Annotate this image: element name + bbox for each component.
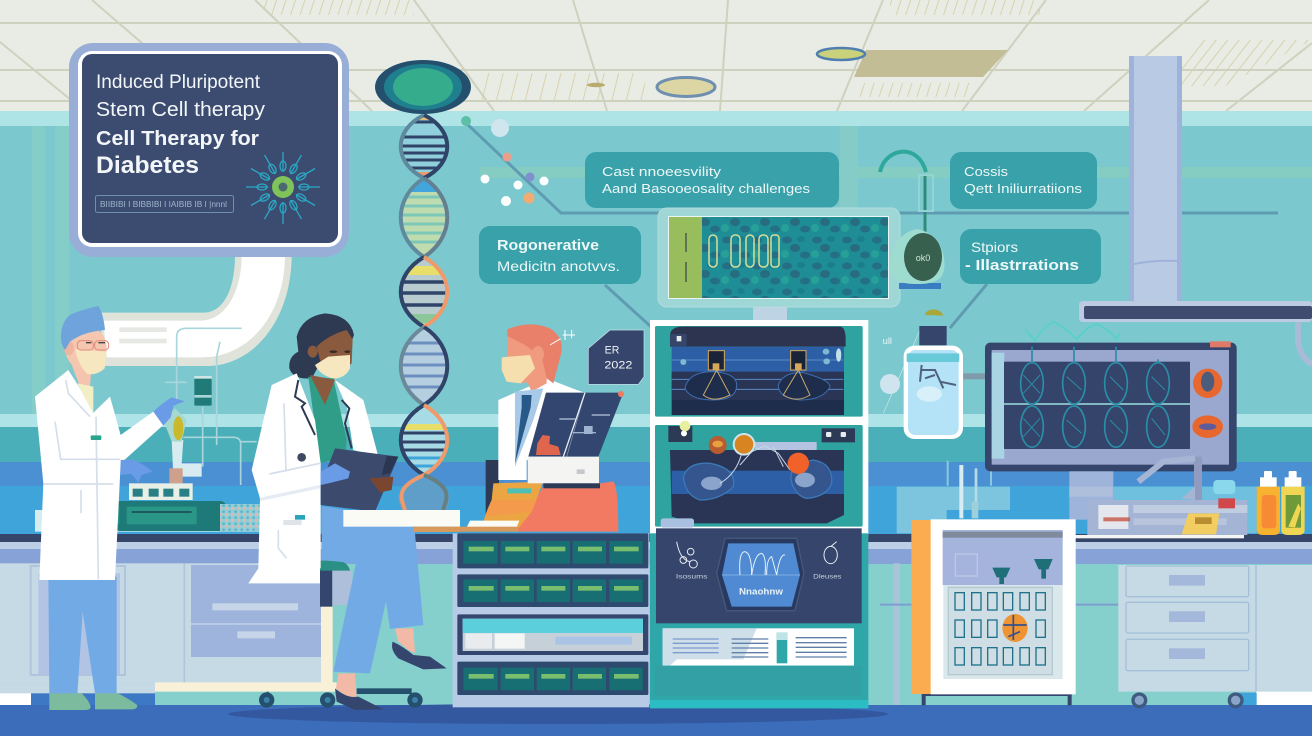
DNA top disc xyxy=(375,60,471,114)
control panel: Dleuses xyxy=(813,574,842,580)
red drape xyxy=(517,481,618,532)
icon: stem cell xyxy=(246,152,320,224)
rack row 4 xyxy=(457,662,648,695)
rolling stool xyxy=(155,561,423,708)
column shelf arm xyxy=(1079,301,1312,322)
desk papers xyxy=(450,510,519,532)
pancreas specimen xyxy=(1002,614,1028,642)
printed report xyxy=(663,628,854,666)
wave above monitor xyxy=(1025,322,1120,341)
callout: illustrations: - Illastrrations xyxy=(965,257,1079,274)
stethoscope icon xyxy=(677,542,697,568)
tagged leaf: ull xyxy=(883,336,892,346)
tablet xyxy=(321,448,398,512)
title text: Cell Therapy for xyxy=(96,128,259,150)
mask xyxy=(315,355,350,379)
callout: regenerative medicine xyxy=(479,226,641,284)
lower cabinets left xyxy=(0,563,322,693)
rack row 3 xyxy=(457,614,648,655)
jar with vessels xyxy=(904,309,963,439)
title text: Stem Cell therapy xyxy=(96,99,265,121)
ankles xyxy=(336,628,415,697)
status buttons xyxy=(668,421,692,442)
hands xyxy=(321,463,393,492)
ceiling light: green xyxy=(817,48,865,60)
callout: illustrations xyxy=(960,229,1101,284)
callout: accessibility: Cast nnoeesvility xyxy=(602,164,722,179)
drawers xyxy=(191,565,321,657)
face xyxy=(507,333,547,383)
organ thumbnails xyxy=(1192,369,1223,438)
control panel xyxy=(656,528,862,623)
neck and head xyxy=(64,326,107,387)
white laptop base xyxy=(528,457,600,488)
specimen stand xyxy=(959,465,978,518)
right wall column xyxy=(1079,56,1312,364)
control panel: Nnaohnw xyxy=(739,586,783,596)
scientist 3 with laptop xyxy=(450,324,644,532)
upper scan panel xyxy=(655,326,863,417)
callout: costs: Cossis xyxy=(964,164,1009,179)
lab bench items left xyxy=(35,328,262,532)
rack row 1 xyxy=(457,533,648,568)
eyes xyxy=(329,350,350,353)
left equipment rack xyxy=(453,533,649,707)
title sign xyxy=(69,43,349,257)
neck and scrubs xyxy=(308,375,347,463)
monitor screen pattern xyxy=(702,217,888,298)
ceiling fixture xyxy=(587,83,605,87)
rack row 2 xyxy=(457,574,648,607)
central cabinet xyxy=(650,320,868,708)
molecule dots xyxy=(461,116,548,206)
IV bag xyxy=(194,376,212,406)
bench instrument xyxy=(1075,480,1247,538)
mask xyxy=(502,355,535,383)
shoes xyxy=(335,642,447,710)
hair xyxy=(507,324,562,383)
sample plate xyxy=(220,504,260,531)
round gauge: ok0 xyxy=(916,253,930,263)
flask xyxy=(163,408,202,483)
mask xyxy=(75,349,107,374)
monitor stand xyxy=(1069,457,1202,520)
lab coat xyxy=(248,373,378,583)
sign caption box xyxy=(96,196,234,212)
cell chart xyxy=(1021,347,1169,447)
scientist 2 seated xyxy=(248,313,447,710)
orange bottle xyxy=(1257,471,1280,535)
IV tubing xyxy=(165,328,257,485)
callout: illustrations: Stpiors xyxy=(971,239,1018,255)
monitor green sidebar xyxy=(669,217,702,298)
monitor bracket xyxy=(963,373,1000,379)
round gauge xyxy=(890,229,944,289)
ceiling light: cream xyxy=(657,78,715,96)
ceiling panel xyxy=(854,50,1008,77)
shirt and tie xyxy=(515,388,543,467)
title text xyxy=(96,72,265,179)
neck xyxy=(524,375,547,392)
callout: regenerative medicine: Medicitn anotvvs. xyxy=(497,258,620,274)
gloves xyxy=(121,397,185,483)
teal bench device xyxy=(113,501,227,531)
scientist 1 standing xyxy=(35,306,185,710)
glasses xyxy=(77,341,109,350)
hexagon display xyxy=(717,538,804,611)
date badge xyxy=(588,330,644,384)
monitor gauge bars xyxy=(709,235,779,267)
callout: accessibility: Aand Basooeosality challenges xyxy=(602,181,811,196)
right drawers xyxy=(1118,565,1312,708)
tagged leaf xyxy=(880,330,920,413)
coat xyxy=(35,370,163,580)
right side lab xyxy=(880,309,1312,708)
shoes xyxy=(49,693,137,710)
date badge: 2022 xyxy=(604,359,632,371)
laptop xyxy=(528,391,624,480)
ceiling xyxy=(0,0,1312,111)
DNA double helix xyxy=(375,60,471,511)
title text: Induced Pluripotent xyxy=(96,72,261,93)
callout: regenerative medicine: Rogonerative xyxy=(497,237,599,254)
face xyxy=(317,330,353,380)
duct pipe xyxy=(100,255,292,366)
book stack xyxy=(483,482,543,531)
sign caption box: BIIBIBI I BIBBIBI I IAIBIB IB I |nnnl xyxy=(100,199,227,209)
surgical cap xyxy=(61,306,105,350)
callout: costs xyxy=(950,152,1097,209)
analyzer box xyxy=(129,483,193,500)
title text: Diabetes xyxy=(96,152,199,179)
callout: accessibility xyxy=(585,152,839,208)
control panel: Isosums xyxy=(676,574,708,580)
callout: costs: Qett Iniliurratiions xyxy=(964,181,1083,196)
hair clip icon xyxy=(550,330,575,345)
hair xyxy=(289,313,354,379)
vial grid xyxy=(955,593,1045,665)
date badge: ER xyxy=(605,344,620,356)
incubator xyxy=(911,519,1076,705)
pants xyxy=(48,577,117,695)
yellow bottle xyxy=(1281,471,1305,535)
wall monitor xyxy=(985,322,1237,471)
lower scan panel xyxy=(655,421,863,528)
faucet instrument xyxy=(880,152,933,258)
cabinet left post xyxy=(893,563,900,705)
connector lines xyxy=(465,122,1278,335)
pants xyxy=(322,506,423,673)
right bench white top xyxy=(343,510,460,532)
wall blocks xyxy=(880,461,1257,533)
organs xyxy=(683,460,832,500)
coat xyxy=(498,378,587,480)
wall pipe xyxy=(1298,322,1312,364)
pancreas icon xyxy=(824,542,837,564)
center monitor xyxy=(658,208,900,321)
